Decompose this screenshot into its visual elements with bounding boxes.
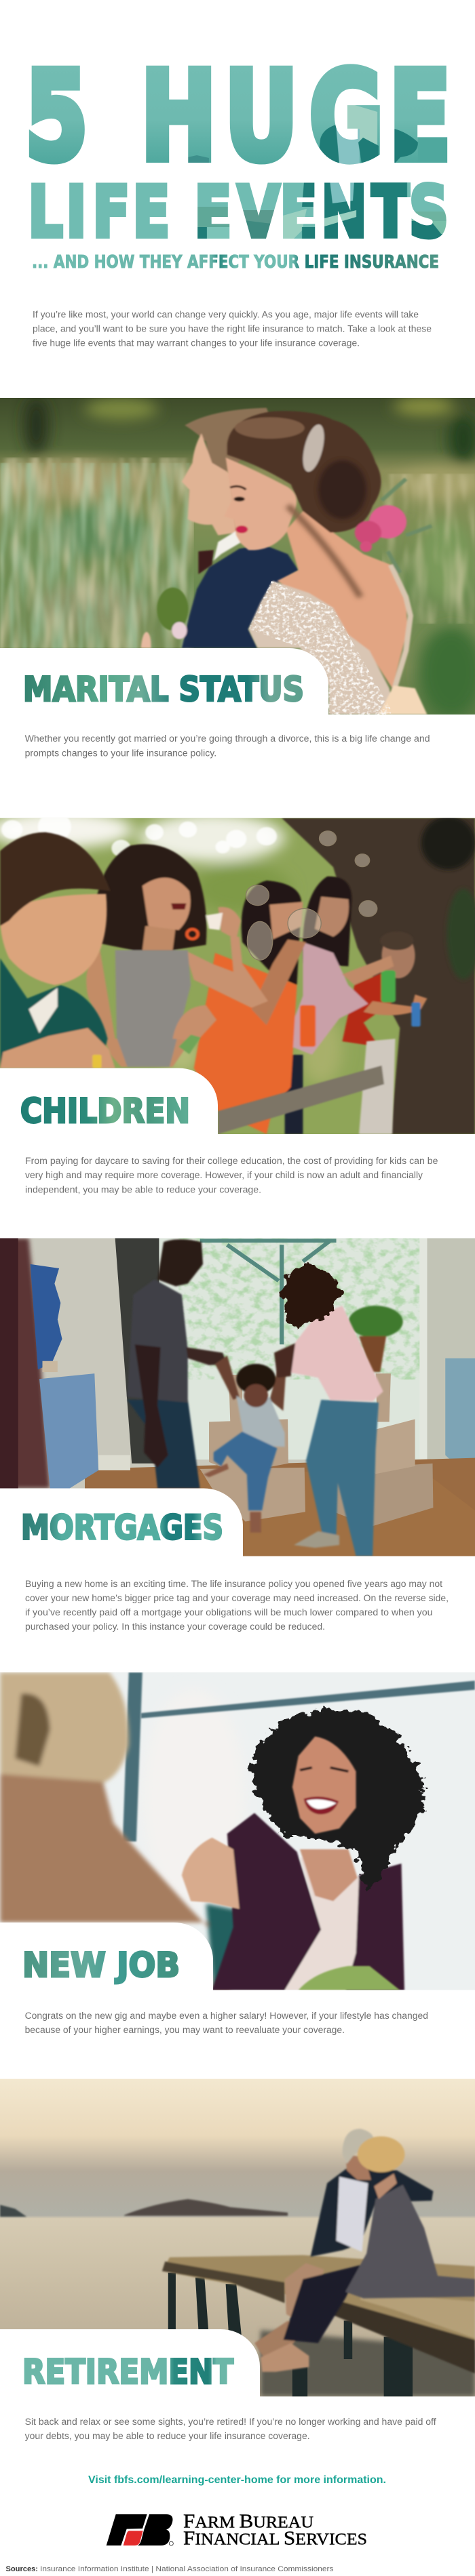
body text: new job <box>25 2011 428 2035</box>
body text: mortgages: if you’ve recently paid off a mortgage your obligations will be much lower compared to when you <box>25 1607 433 1617</box>
panel: retirement <box>0 2079 475 2441</box>
heading: new job: NEW JOB <box>22 1946 180 1985</box>
body text: new job: because of your higher earnings, you may want to reevaluate your coverage. <box>25 2025 345 2035</box>
pier deck <box>162 2255 475 2373</box>
plant <box>348 1306 403 1372</box>
wordmark: FINANCIAL SERVICES <box>183 2527 367 2549</box>
fence <box>218 1039 396 1134</box>
panel: marital status <box>0 396 475 758</box>
lace texture <box>248 581 394 715</box>
floor <box>85 1458 475 1556</box>
body text: mortgages <box>25 1579 449 1632</box>
body text: children <box>25 1156 438 1194</box>
person from behind <box>0 1672 247 1990</box>
body text: mortgages: purchased your policy. In this instance your coverage could be reduced. <box>25 1622 325 1632</box>
body text: new job: Congrats on the new gig and maybe even a higher salary! However, if your lifestyle has changed <box>25 2011 428 2021</box>
child in grey tank top <box>86 844 268 1067</box>
white title tab <box>0 1923 213 1990</box>
intro text: five huge life events that may warrant changes to your life insurance coverage. <box>33 338 360 348</box>
title <box>25 46 451 273</box>
title line: 5 HUGE: 5 HUGE <box>25 46 451 188</box>
icon: FB mark <box>107 2514 173 2545</box>
photo: family in new home <box>0 1238 475 1556</box>
title line: LIFE EVENTS: LIFE EVENTS <box>28 172 449 253</box>
boy in plaid shirt <box>0 832 115 1068</box>
panel: new job <box>0 1672 475 2035</box>
heading: marital status: MARITAL STATUS <box>23 670 304 709</box>
window frame <box>123 1672 142 1841</box>
photo: handshake <box>0 1672 475 1990</box>
body text: retirement <box>25 2417 436 2441</box>
panel: children <box>0 811 475 1194</box>
intro text: place, and you’ll want to be sure you have the right life insurance to match. Take a look at these <box>33 324 432 334</box>
blurred reeds <box>0 463 194 651</box>
dark water in foreground <box>261 2331 475 2396</box>
body text: mortgages: cover your new home’s bigger price tag and your coverage may need increased. On the reverse side, <box>25 1593 449 1603</box>
father <box>128 1239 227 1488</box>
heading: mortgages: MORTGAGES <box>21 1508 223 1547</box>
window and garden <box>159 1238 421 1460</box>
intro text: If you’re like most, your world can change very quickly. As you age, major life events will take <box>33 309 419 320</box>
heading: retirement: RETIREMENT <box>22 2352 233 2392</box>
heading: children: CHILDREN <box>20 1091 190 1131</box>
body text: children: From paying for daycare to saving for their college education, the cost of providing for kids can be <box>25 1156 438 1166</box>
body text: marital status <box>25 733 430 758</box>
wordmark <box>183 2511 367 2549</box>
body text: marital status: Whether you recently got married or you’re going through a divorce, this is a big life change and <box>25 733 430 744</box>
bubbles <box>246 831 377 960</box>
right wall and cupboards <box>427 1238 475 1460</box>
body text: retirement: your debts, you may be able to reduce your life insurance coverage. <box>25 2431 310 2441</box>
white title tab <box>0 648 328 715</box>
body text: children: very high and may require more coverage. However, if your child is now an adult and financially <box>25 1170 423 1180</box>
white title tab <box>0 1489 243 1556</box>
woman laughing <box>182 1813 404 1990</box>
pier posts <box>168 2273 413 2396</box>
panel: mortgages <box>0 1238 475 1632</box>
children in background <box>194 877 427 1134</box>
groom <box>141 408 299 648</box>
white title tab <box>0 1068 218 1135</box>
curtain, shelf and dresser <box>0 1238 50 1488</box>
islands <box>0 2199 288 2217</box>
plant <box>299 1966 400 1990</box>
body text: children: independent, you may be able to reduce your coverage. <box>25 1185 261 1194</box>
intro text <box>33 309 432 348</box>
call to action: Visit fbfs.com/learning-center-home for more information. <box>88 2474 386 2486</box>
wordmark: FARM BUREAU <box>183 2511 314 2533</box>
photo: wedding couple <box>0 398 475 715</box>
white title tab <box>0 2329 260 2397</box>
photo: children blowing bubbles <box>0 818 475 1134</box>
body text: mortgages: Buying a new home is an exciting time. The life insurance policy you opened five years ago may not <box>25 1579 442 1589</box>
photo: retired couple on pier <box>0 2078 475 2397</box>
bride <box>224 411 432 715</box>
sources: Insurance Information Institute | National Association of Insurance Commissioners <box>40 2565 334 2573</box>
logo: Farm Bureau Financial Services <box>107 2511 367 2549</box>
body text: retirement: Sit back and relax or see some sights, you’re retired! If you’re no longer working and have paid off <box>25 2417 436 2427</box>
sources: Sources: <box>5 2565 38 2573</box>
dark door <box>115 1238 159 1464</box>
tree trunk <box>282 818 475 1134</box>
child <box>204 1356 286 1533</box>
body text: marital status: prompts changes to your life insurance policy. <box>25 748 216 758</box>
couple <box>254 2129 475 2372</box>
boxes <box>200 1373 433 1527</box>
mother <box>274 1306 383 1556</box>
